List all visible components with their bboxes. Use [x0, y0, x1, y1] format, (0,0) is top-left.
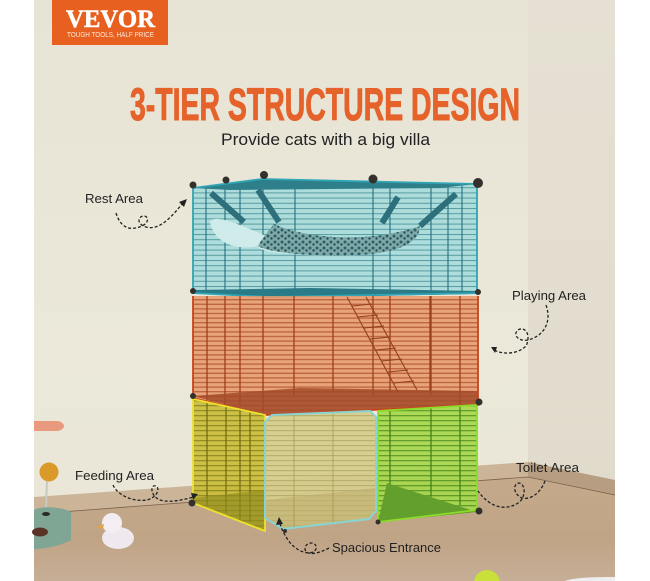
- cat toy: pom on stick: [32, 462, 71, 549]
- subtitle: Provide cats with a big villa: [221, 130, 431, 149]
- tier: bottom yellow feeding panel: [193, 399, 265, 531]
- pink object at wall: [34, 421, 64, 431]
- label: Rest Area: [85, 192, 187, 228]
- pink bit bottom right: [565, 577, 615, 581]
- label: Toilet Area: Toilet Area: [516, 461, 579, 475]
- tier: bottom green toilet panel: [378, 405, 477, 522]
- label: Playing Area: Playing Area: [512, 289, 586, 303]
- tier: bottom door spacious entrance: [265, 411, 376, 529]
- logo: VEVOR: VEVOR: [66, 6, 156, 33]
- logo: VEVOR: [52, 0, 168, 45]
- label: Rest Area: Rest Area: [85, 192, 143, 206]
- tennis ball: [474, 570, 500, 581]
- logo: VEVOR: TOUGH TOOLS, HALF PRICE: [67, 30, 154, 39]
- label: Feeding Area: Feeding Area: [75, 469, 154, 483]
- label: Feeding Area: [75, 469, 198, 501]
- label: Spacious Entrance: [276, 517, 441, 555]
- cage: [188, 171, 483, 533]
- tier: middle orange playing area: [193, 296, 478, 415]
- label: Playing Area: [491, 289, 586, 353]
- connectors: [188, 171, 483, 533]
- tier: top teal rest area: [193, 179, 477, 298]
- label: Spacious Entrance: Spacious Entrance: [332, 541, 441, 555]
- ladder: [347, 297, 417, 392]
- label: Toilet Area: [478, 461, 579, 507]
- hammock: [210, 190, 456, 256]
- rubber duck: [96, 513, 134, 549]
